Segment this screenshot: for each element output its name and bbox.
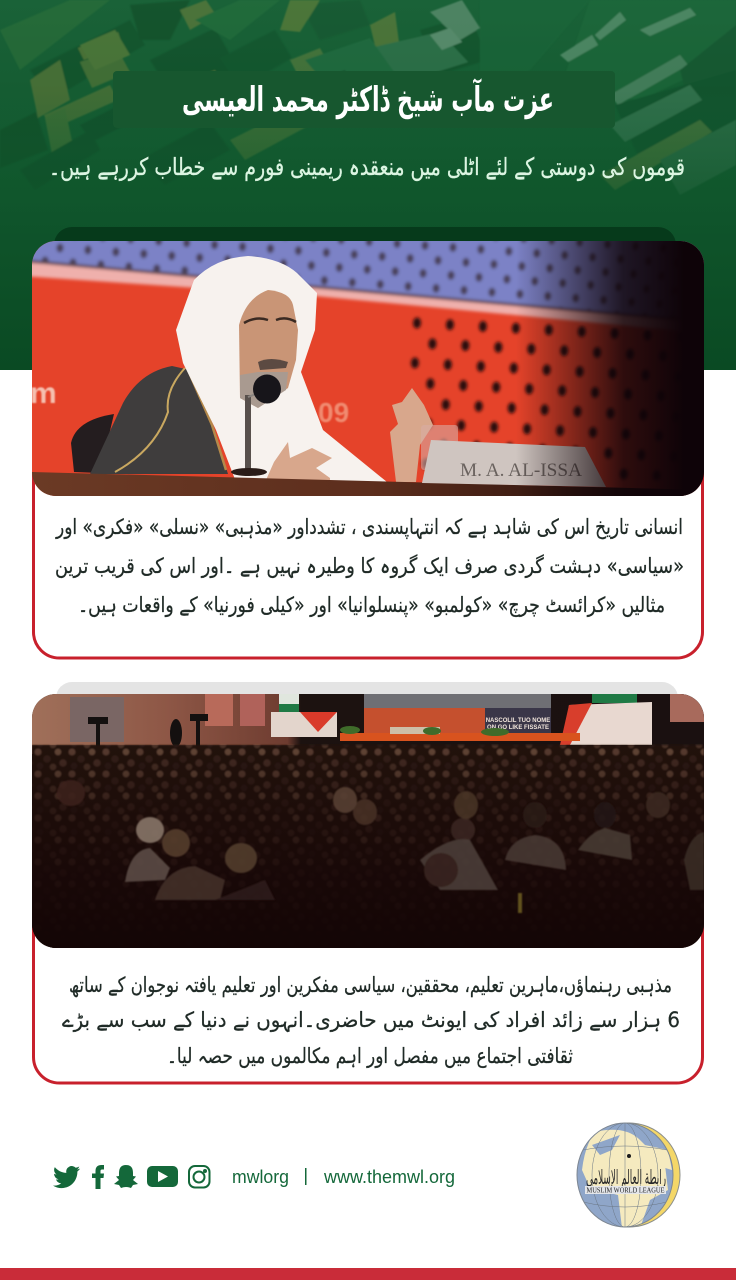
microphone [231, 374, 281, 476]
card 1 border [34, 440, 702, 658]
name plate [422, 440, 606, 487]
icon: facebook [92, 1165, 104, 1189]
card 2 text: 6 ہزار سے زائد افراد کی ایونٹ میں حاضری۔انہوں نے دنیا کے سب سے بڑے [62, 1008, 680, 1032]
card 2 text: ثقافتی اجتماع میں مفصل اور اہم مکالموں میں حصہ لیا۔ [167, 1044, 573, 1069]
glass [421, 425, 458, 470]
separator [305, 1168, 306, 1185]
website: www.themwl.org [323, 1167, 455, 1187]
stage screens: NASCOLIL TUO NOME [486, 718, 550, 724]
green header with aerial city background [0, 0, 736, 370]
icon: twitter [53, 1166, 80, 1188]
icon: instagram [189, 1166, 210, 1188]
social handle: mwlorg [232, 1167, 289, 1187]
panel: first card [22, 227, 714, 658]
card 2 border [34, 900, 702, 1083]
hands [266, 388, 433, 482]
camera operators [88, 714, 208, 748]
stage screens: ON GO LIKE FISSATE [487, 725, 549, 731]
face [239, 290, 298, 408]
desk [32, 472, 704, 496]
logo: Muslim World League globe [577, 1123, 680, 1228]
stage logo letters: 09 [318, 397, 349, 428]
photo: audience at conference hall [22, 694, 714, 950]
panel: second card [22, 682, 714, 1083]
photo: speaker at microphone [22, 231, 714, 496]
logo English wordmark: MUSLIM WORLD LEAGUE [586, 1186, 664, 1194]
stage logo letters: m [30, 377, 57, 410]
card 2 text [62, 973, 680, 1069]
stage logo letters [32, 386, 349, 423]
name plate: M. A. AL-ISSA [460, 460, 582, 481]
stage screens [271, 694, 652, 745]
footer social row [53, 1165, 455, 1189]
bisht robe [90, 366, 228, 474]
white headscarf [176, 256, 387, 482]
lit spectators [57, 780, 704, 913]
icon: snapchat [114, 1165, 138, 1188]
chair [71, 414, 114, 473]
bottom red bar [0, 1268, 736, 1280]
card 1 text [55, 515, 684, 617]
icon: youtube [147, 1166, 178, 1187]
title band [113, 71, 615, 128]
crowd [22, 745, 714, 950]
wall curtains [70, 694, 704, 742]
